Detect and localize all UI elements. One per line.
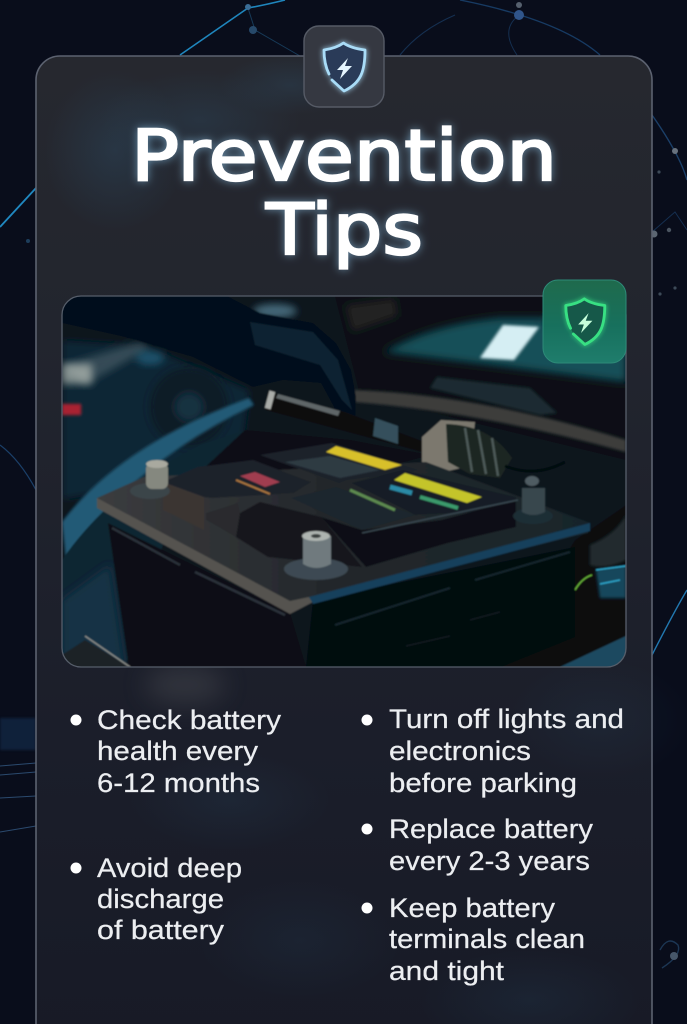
- network arcs: left edge: [0, 445, 36, 832]
- photo: battery terminals: [130, 460, 553, 580]
- tip: check battery health: Check battery: [97, 705, 282, 735]
- tip: keep terminals clean: terminals clean: [389, 924, 585, 954]
- tip: check battery health: health every: [97, 736, 259, 766]
- tip: replace battery: every 2-3 years: [389, 846, 590, 876]
- photo: gloved hand: [62, 296, 356, 430]
- network arcs: top right and right edge: [400, 0, 687, 968]
- photo: bottom left bracket: [62, 636, 130, 667]
- photo: blurred background car: [62, 304, 297, 500]
- tip: keep terminals clean: and tight: [389, 956, 505, 986]
- photo: engine bay and windshield: [62, 296, 626, 667]
- top badge icon: shield with bolt: [304, 26, 384, 107]
- photo: technician checking car battery: [62, 296, 626, 667]
- photo: tester tool and clamp: [265, 391, 565, 478]
- tip: keep terminals clean: Keep battery: [389, 893, 556, 923]
- photo: yellow and colour labels: [236, 446, 482, 510]
- network arcs: top left: [0, 0, 300, 243]
- photo border: [62, 296, 626, 667]
- tip: avoid deep discharge: of battery: [97, 915, 225, 945]
- green shield badge: [543, 280, 626, 363]
- tip: replace battery: [362, 814, 594, 876]
- title: [131, 115, 557, 271]
- tip: keep terminals clean: [362, 893, 585, 986]
- tip: check battery health: [70, 705, 282, 798]
- tip: avoid deep discharge: Avoid deep: [97, 853, 242, 883]
- tip: turn off lights: Turn off lights and: [389, 704, 624, 734]
- photo: battery lids: [163, 443, 518, 567]
- tip: replace battery: Replace battery: [389, 814, 594, 844]
- title: Prevention: [131, 115, 557, 197]
- tip: check battery health: 6-12 months: [97, 768, 260, 798]
- title: Tips: [265, 189, 423, 271]
- tip: turn off lights: electronics: [389, 736, 531, 766]
- tip: avoid deep discharge: discharge: [97, 884, 224, 914]
- photo: battery body: [97, 462, 590, 667]
- tip: avoid deep discharge: [70, 853, 242, 945]
- tip: turn off lights: before parking: [389, 768, 577, 798]
- tip: turn off lights: [362, 704, 624, 798]
